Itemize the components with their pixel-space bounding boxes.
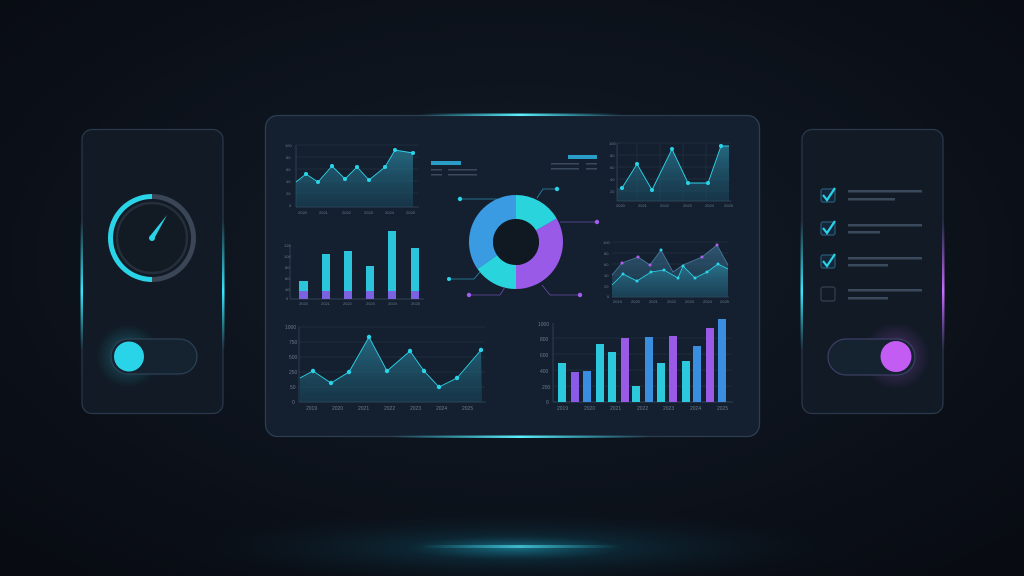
chart: top-right area chart: 2020 (616, 203, 626, 208)
chart: donut (447, 187, 599, 297)
chart: bottom-left area chart: 2023 (410, 406, 421, 412)
icon: gauge (110, 196, 194, 280)
chart: top-right area chart: 2025 (724, 203, 734, 208)
chart: bottom-left area chart: 750 (289, 340, 298, 346)
chart: top-left area chart: 60 (286, 167, 291, 172)
chart: bottom-left area chart: 2022 (384, 406, 395, 412)
chart: top-left area chart: 40 (286, 179, 291, 184)
chart: mid-right dual area chart: 2024 (703, 299, 713, 304)
chart: bottom-right bar chart: 2023 (663, 406, 674, 412)
chart: top-left area chart: 20 (286, 191, 291, 196)
chart: bottom-left area chart: 500 (289, 355, 298, 361)
chart: mid-right dual area chart: 80 (604, 251, 609, 256)
chart: top-left area chart: 2021 (319, 210, 329, 215)
chart: bottom-right bar chart: 1000 (538, 322, 549, 328)
chart: mid-right dual area chart: 2023 (685, 299, 695, 304)
toggle: cyan on (96, 324, 197, 388)
chart: mid-left bar chart: 0 (286, 296, 289, 301)
chart: bottom-left area chart: 2020 (332, 406, 343, 412)
chart: bottom-right bar chart: 2025 (717, 406, 728, 412)
chart: mid-left bar chart: 2021 (321, 301, 331, 306)
chart: top-right area chart: 2021 (638, 203, 648, 208)
chart: bottom-right bar chart: 0 (546, 400, 549, 406)
chart: top-left area chart: 2020 (298, 210, 308, 215)
chart: bottom-right bar chart: 2019 (557, 406, 568, 412)
chart: top-left area chart (285, 143, 419, 215)
panel: main dashboard (266, 114, 760, 438)
chart: mid-right dual area chart: 40 (604, 273, 609, 278)
chart: bottom-left area chart: 2021 (358, 406, 369, 412)
chart: bottom-left area chart: 50 (290, 385, 296, 391)
legend: right (551, 155, 597, 170)
chart: bottom-right bar chart: 800 (540, 337, 549, 343)
chart: bottom-right bar chart: 600 (540, 353, 549, 359)
checklist (821, 188, 922, 301)
chart: bottom-right bar chart: 2021 (610, 406, 621, 412)
chart: mid-right dual area chart: 2025 (720, 299, 730, 304)
chart: mid-right dual area chart: 20 (604, 284, 609, 289)
chart: mid-left bar chart (284, 231, 424, 306)
chart: bottom-right bar chart: 2022 (637, 406, 648, 412)
chart: mid-right dual area chart: 2019 (613, 299, 623, 304)
chart: bottom-left area chart: 0 (292, 400, 295, 406)
chart: bottom-left area chart: 2019 (306, 406, 317, 412)
chart: top-right area chart: 80 (610, 153, 615, 158)
chart: top-left area chart: 2022 (342, 210, 352, 215)
chart: mid-right dual area chart: 2021 (649, 299, 659, 304)
chart: top-left area chart: 80 (286, 155, 291, 160)
panel: right checklist card (800, 130, 944, 414)
chart: mid-right dual area chart: 2022 (667, 299, 677, 304)
chart: mid-right dual area chart: 0 (607, 294, 610, 299)
chart: top-left area chart: 100 (285, 143, 292, 148)
chart: bottom-right bar chart: 400 (540, 369, 549, 375)
chart: mid-left bar chart: 80 (285, 265, 290, 270)
panel: left gauge card (80, 130, 224, 414)
chart: mid-left bar chart: 2025 (411, 301, 421, 306)
chart: bottom-right bar chart (538, 319, 733, 412)
chart: mid-right dual area chart (603, 240, 730, 304)
chart: mid-left bar chart: 60 (285, 276, 290, 281)
chart: mid-left bar chart: 100 (284, 254, 291, 259)
chart: top-right area chart: 2024 (705, 203, 715, 208)
chart: top-right area chart: 100 (609, 141, 616, 146)
chart: top-left area chart: 2025 (406, 210, 416, 215)
legend: left (431, 161, 477, 176)
chart: mid-left bar chart: 2023 (366, 301, 376, 306)
chart: top-left area chart: 0 (289, 203, 292, 208)
chart: bottom-left area chart: 2025 (462, 406, 473, 412)
toggle: purple on (828, 322, 930, 390)
chart: bottom-right bar chart: 200 (542, 385, 551, 391)
chart: top-right area chart (609, 141, 734, 208)
chart: mid-left bar chart: 2020 (299, 301, 309, 306)
chart: top-right area chart: 60 (610, 165, 615, 170)
chart: mid-right dual area chart: 100 (603, 240, 610, 245)
chart: bottom-left area chart: 1000 (285, 325, 296, 331)
chart: top-right area chart: 40 (610, 177, 615, 182)
chart: top-right area chart: 2023 (683, 203, 693, 208)
chart: top-right area chart: 2022 (660, 203, 670, 208)
chart: top-left area chart: 2024 (385, 210, 395, 215)
chart: mid-left bar chart: 2022 (343, 301, 353, 306)
chart: mid-right dual area chart: 60 (604, 262, 609, 267)
chart: bottom-right bar chart: 2020 (584, 406, 595, 412)
chart: bottom-left area chart: 250 (289, 370, 298, 376)
chart: top-right area chart: 20 (610, 189, 615, 194)
chart: mid-left bar chart: 120 (284, 243, 291, 248)
chart: bottom-left area chart (285, 325, 486, 412)
chart: mid-left bar chart: 40 (285, 287, 290, 292)
chart: mid-left bar chart: 2024 (388, 301, 398, 306)
chart: mid-right dual area chart: 2020 (631, 299, 641, 304)
chart: bottom-right bar chart: 2024 (690, 406, 701, 412)
chart: bottom-left area chart: 2024 (436, 406, 447, 412)
chart: top-left area chart: 2023 (364, 210, 374, 215)
